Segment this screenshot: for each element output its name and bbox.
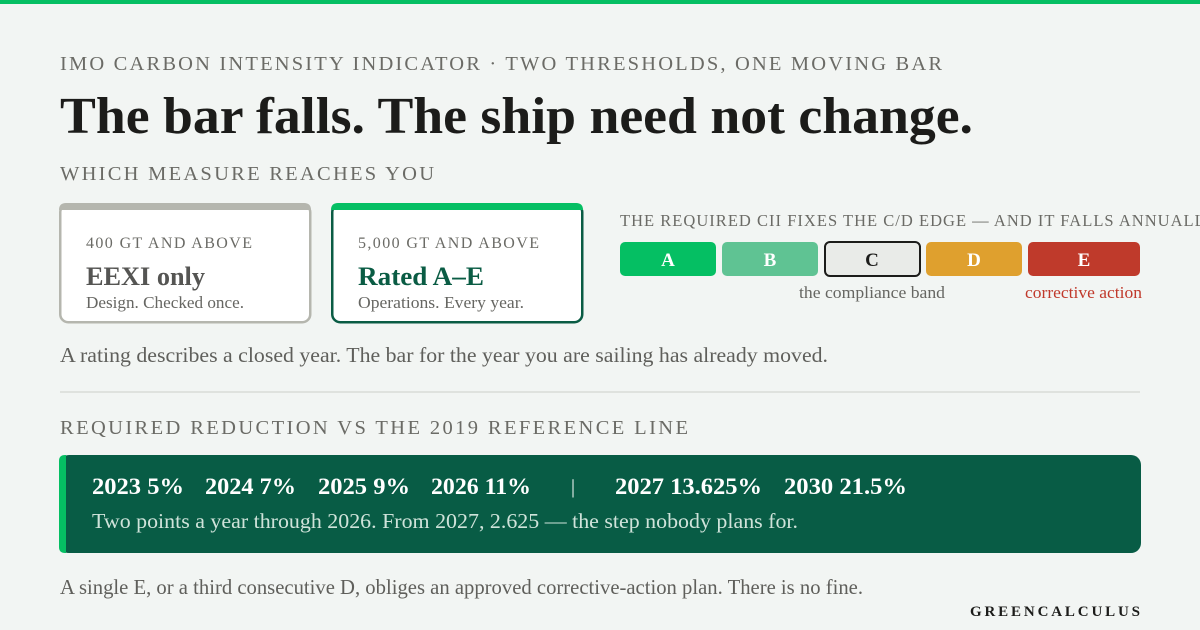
band C <box>825 242 920 276</box>
schedule figures: 2024 7% <box>205 474 296 499</box>
schedule figures: 2030 21.5% <box>784 474 907 499</box>
kicker: IMO CARBON INTENSITY INDICATOR · TWO THRESHOLDS, ONE MOVING BAR <box>60 53 942 75</box>
schedule figures: 2023 5% <box>92 474 184 499</box>
band B: B <box>764 250 777 271</box>
schedule figures: 2027 13.625% <box>615 474 762 499</box>
band E <box>1028 242 1140 276</box>
title: The bar falls. The ship need not change. <box>60 88 973 145</box>
panel: rated A–E card <box>331 203 583 322</box>
band D <box>926 242 1022 276</box>
card label: 5,000 GT AND ABOVE <box>358 235 539 252</box>
band B <box>722 242 818 276</box>
card heading: EEXI only <box>86 262 205 291</box>
label: compliance band: the compliance band <box>799 283 946 302</box>
text: closed year statement: A rating describes a closed year. The bar for the year you are sailing has already moved. <box>60 343 828 367</box>
card label: 400 GT AND ABOVE <box>86 235 252 252</box>
label: corrective action: corrective action <box>1025 283 1143 302</box>
rating scale A to E <box>620 242 1140 276</box>
band C: C <box>865 250 879 271</box>
schedule figures <box>92 474 907 499</box>
band A: A <box>661 250 675 271</box>
panel: reduction schedule <box>59 455 1141 553</box>
schedule figures: 2026 11% <box>431 474 531 499</box>
schedule note: Two points a year through 2026. From 2027, 2.625 — the step nobody plans for. <box>92 509 798 533</box>
band E: E <box>1078 250 1090 271</box>
card heading: Rated A–E <box>358 262 484 291</box>
heading: required CII: THE REQUIRED CII FIXES THE C/D EDGE — AND IT FALLS ANNUALLY <box>620 211 1200 230</box>
brand wordmark: GREENCALCULUS <box>970 604 1140 620</box>
schedule figures: | <box>571 476 575 498</box>
panel: EEXI only card <box>59 203 311 322</box>
heading: required reduction: REQUIRED REDUCTION VS THE 2019 REFERENCE LINE <box>60 417 688 439</box>
text: corrective action footnote: A single E, or a third consecutive D, obliges an approved corrective-action plan. There is no fine. <box>60 575 863 599</box>
heading: which measure reaches you: WHICH MEASURE REACHES YOU <box>60 163 434 185</box>
card note: Design. Checked once. <box>86 293 244 312</box>
band D: D <box>967 250 981 271</box>
schedule figures: 2025 9% <box>318 474 410 499</box>
card note: Operations. Every year. <box>358 293 524 312</box>
band A <box>620 242 716 276</box>
